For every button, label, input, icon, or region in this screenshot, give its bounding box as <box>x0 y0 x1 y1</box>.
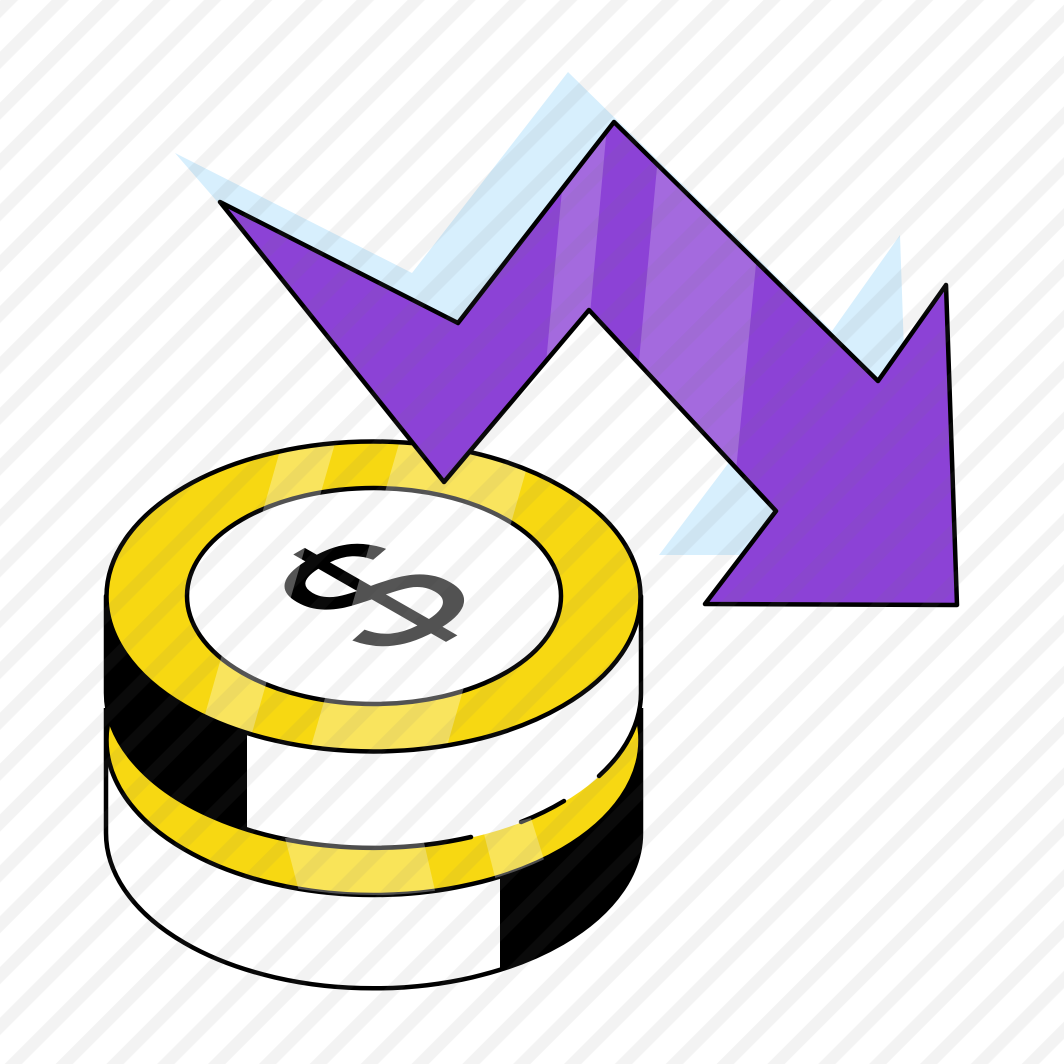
arrow shadow <box>175 72 911 555</box>
upper coin face <box>106 430 640 760</box>
downward arrow <box>220 120 957 605</box>
arrow highlights <box>546 136 756 465</box>
lower coin highlights <box>285 818 546 895</box>
upper coin rim outlines <box>106 596 641 848</box>
lower coin <box>104 708 644 990</box>
upper coin body <box>108 623 638 846</box>
face highlights <box>205 444 526 750</box>
dollar symbol: $ <box>215 504 531 685</box>
coin stack <box>100 430 645 1000</box>
